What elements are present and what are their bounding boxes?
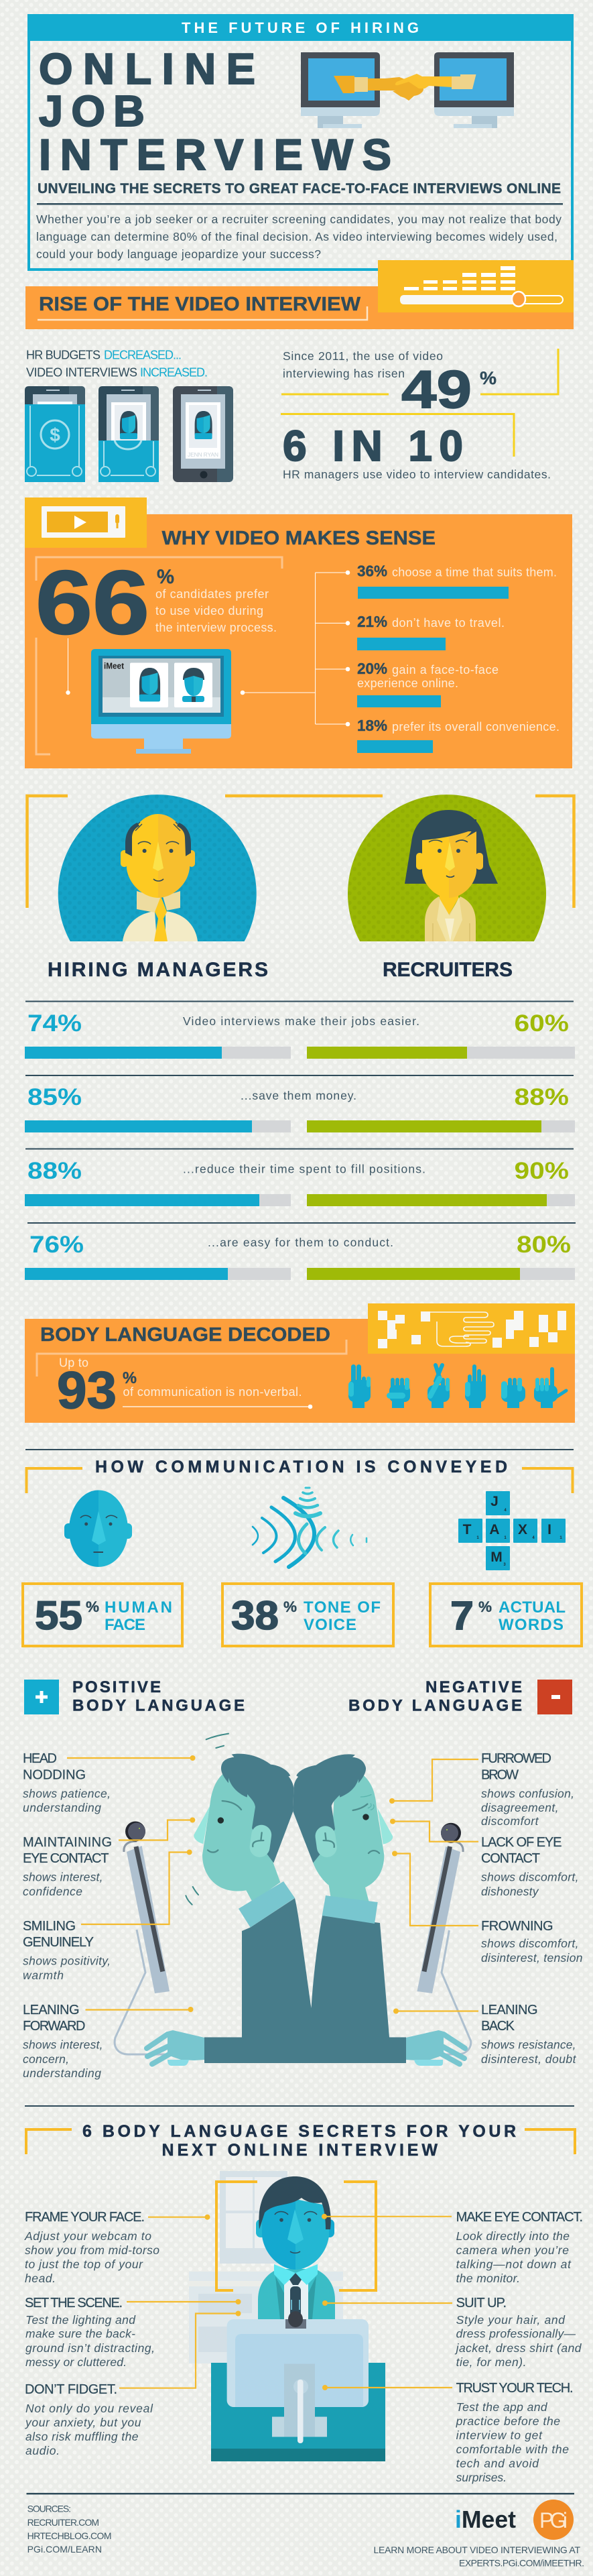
- callout: head nodding: [23, 1751, 196, 1814]
- tip: make eye contact: Look directly into the: [456, 2229, 570, 2243]
- icon: phone half uncovered: [98, 386, 159, 482]
- callout: smiling genuinely: shows positivity,: [23, 1954, 111, 1968]
- equalizer panel: [378, 260, 574, 312]
- callout: lack of eye contact: dishonesty: [481, 1885, 539, 1898]
- heading: hiring managers: HIRING MANAGERS: [48, 959, 268, 981]
- callout: furrowed brow: FURROWED: [481, 1751, 551, 1766]
- intro paragraph: language can determine 80% of the final decision. As video interviewing becomes widely used,: [36, 230, 557, 243]
- panel: 49 percent stat: interviewing has risen: [283, 367, 405, 380]
- icon: scrabble tiles: 1: [504, 1536, 507, 1540]
- intro paragraph: could your body language jeopardize your success?: [36, 247, 321, 261]
- stat card: actual words: ACTUAL: [499, 1598, 566, 1617]
- bar chart: reasons: 21%: [357, 613, 387, 630]
- row: reduce time: ...reduce their time spent to fill positions.: [183, 1163, 425, 1176]
- portrait: recruiter: [348, 795, 546, 941]
- bar chart: reasons: prefer its overall convenience.: [392, 720, 559, 734]
- icon: two monitors shaking hands: [301, 52, 514, 128]
- footer call to action: EXPERTS.PGi.COM/iMEETHR.: [459, 2557, 584, 2568]
- illustration: two mirrored candidates: [115, 1734, 471, 2066]
- callout: leaning forward: FORWARD: [23, 2019, 86, 2034]
- heading: positive: BODY LANGUAGE: [72, 1696, 245, 1715]
- icon: scrabble tiles: A: [489, 1522, 500, 1537]
- callout: leaning back: LEANING: [481, 2003, 537, 2017]
- laptop right: [417, 1823, 471, 2054]
- tip: suit up: Style your hair, and: [456, 2313, 566, 2327]
- icon: scrabble tiles: 4: [504, 1509, 507, 1513]
- icon: scrabble tiles: 4: [532, 1536, 535, 1540]
- callout: maintaining eye contact: EYE CONTACT: [23, 1851, 109, 1866]
- stat: 66 percent: 66: [36, 552, 149, 653]
- icon: pixel pattern with pointing hand: [368, 1303, 575, 1354]
- stat card: human face: %: [86, 1598, 99, 1615]
- tip: make eye contact: talking—not down at: [456, 2258, 572, 2271]
- text: budgets decreased: DECREASED...: [104, 349, 182, 362]
- panel: 49 percent stat: %: [480, 368, 497, 388]
- row: save money: [25, 1075, 575, 1132]
- tip: don't fidget: [25, 2310, 241, 2457]
- callout: head nodding: understanding: [23, 1801, 101, 1814]
- tip: set the scene: ground isn’t distracting,: [25, 2341, 155, 2355]
- callout: leaning back: disinterest, doubt: [481, 2052, 577, 2066]
- callout: smiling genuinely: SMILING: [23, 1919, 76, 1934]
- kicker: the future of hiring: THE FUTURE OF HIRING: [182, 19, 419, 36]
- intro paragraph: Whether you’re a job seeker or a recruiter screening candidates, you may not realize that body: [36, 213, 562, 226]
- callout: frowning: [392, 1851, 583, 1965]
- tip: make eye contact: [322, 2210, 583, 2285]
- stat: 66 percent: [36, 552, 277, 653]
- heading: negative: [348, 1678, 572, 1715]
- row: jobs easier: 60%: [515, 1010, 569, 1037]
- tip: suit up: dress professionally—: [456, 2327, 576, 2341]
- panel: positive vs negative body language: [23, 1678, 583, 2080]
- tip: set the scene: messy or cluttered.: [25, 2355, 127, 2369]
- text: budgets decreased: INCREASED.: [140, 366, 208, 379]
- callout: frowning: FROWNING: [481, 1919, 553, 1934]
- heading: negative: NEGATIVE: [425, 1678, 522, 1696]
- icon: sound waves: [253, 1488, 367, 1567]
- callout: maintaining eye contact: [23, 1817, 195, 1898]
- icon: iMeet desktop monitor: [91, 649, 231, 754]
- icon: phone with video candidate: JENN RYAN: [188, 451, 218, 458]
- icon: phone fully covered by dollar: [25, 386, 85, 482]
- callout: furrowed brow: [389, 1751, 574, 1828]
- tip: set the scene: SET THE SCENE.: [25, 2296, 123, 2310]
- icon: scrabble tiles: I: [547, 1522, 551, 1537]
- stat card: actual words: 7: [450, 1593, 474, 1638]
- tip: trust your tech: tech and avoid: [456, 2457, 539, 2470]
- callout: frowning: shows discomfort,: [481, 1936, 579, 1950]
- torsos: [204, 1898, 406, 2063]
- tip: trust your tech: practice before the: [456, 2414, 560, 2428]
- stat: 93 percent: [57, 1356, 312, 1419]
- logo: iMeet: iMeet: [455, 2506, 516, 2533]
- stat card: tone of voice: %: [283, 1598, 297, 1615]
- stat card: human face: FACE: [105, 1616, 145, 1634]
- callout: furrowed brow: shows confusion,: [481, 1787, 574, 1800]
- stat card: human face: [23, 1584, 182, 1646]
- stat: 66 percent: of candidates prefer: [155, 587, 269, 601]
- intro paragraph: [36, 213, 562, 261]
- tip: don't fidget: audio.: [25, 2444, 60, 2457]
- bar chart: reasons: experience online.: [357, 677, 458, 690]
- panel: 6 in 10 stat: HR managers use video to interview candidates.: [283, 468, 551, 481]
- sources: RECRUITER.COM: [27, 2517, 99, 2528]
- logo: PGi: PGi: [539, 2508, 568, 2532]
- stat card: tone of voice: 38: [231, 1593, 279, 1638]
- row: jobs easier: Video interviews make their jobs easier.: [183, 1014, 419, 1028]
- hands: [147, 2030, 465, 2066]
- sources: SOURCES:: [27, 2504, 71, 2514]
- tip: frame your face: Adjust your webcam to: [24, 2229, 151, 2243]
- stat: 93 percent: of communication is non-verbal.: [123, 1385, 302, 1399]
- bar chart: reasons: [357, 562, 559, 753]
- callout: maintaining eye contact: MAINTAINING: [23, 1835, 112, 1850]
- title: INTERVIEWS: [39, 130, 391, 179]
- tip: make eye contact: MAKE EYE CONTACT.: [456, 2210, 583, 2225]
- tip: suit up: tie, for men).: [456, 2355, 527, 2369]
- heading: BODY LANGUAGE DECODED: [40, 1324, 330, 1346]
- tip: set the scene: Test the lighting and: [25, 2313, 136, 2327]
- stat card: actual words: WORDS: [499, 1616, 564, 1634]
- callout: maintaining eye contact: confidence: [23, 1885, 82, 1898]
- callout: leaning forward: LEANING: [23, 2003, 79, 2017]
- tip: don't fidget: your anxiety, but you: [25, 2416, 141, 2429]
- tip: set the scene: make sure the back-: [25, 2327, 135, 2341]
- laptop left: [115, 1821, 170, 2054]
- tip: trust your tech: comfortable with the: [456, 2443, 569, 2456]
- tip: frame your face: FRAME YOUR FACE.: [25, 2210, 145, 2225]
- row: jobs easier: 74%: [27, 1010, 82, 1037]
- row: save money: ...save them money.: [241, 1089, 356, 1102]
- tip: trust your tech: TRUST YOUR TECH.: [456, 2381, 574, 2396]
- tip: suit up: jacket, dress shirt (and: [455, 2341, 582, 2355]
- text: budgets decreased: [26, 349, 208, 379]
- icon: scrabble tiles: J: [490, 1494, 499, 1509]
- heading: recruiters: RECRUITERS: [383, 959, 513, 981]
- stat card: human face: HUMAN: [105, 1598, 172, 1617]
- callout: head nodding: NODDING: [23, 1767, 86, 1782]
- connector tree: [241, 571, 350, 726]
- icon: phone fully covered by dollar: $: [50, 424, 60, 445]
- tip: make eye contact: the monitor.: [456, 2272, 520, 2285]
- row: save money: 85%: [27, 1084, 82, 1110]
- stat card: tone of voice: TONE OF: [304, 1598, 381, 1617]
- panel: how communication is conveyed: [23, 1449, 582, 1646]
- panel: 49 percent stat: [281, 349, 558, 419]
- callout: lack of eye contact: shows discomfort,: [481, 1871, 579, 1884]
- callout: head nodding: HEAD: [23, 1751, 57, 1766]
- panel: why video makes sense: [25, 497, 572, 768]
- callout: leaning forward: shows interest,: [23, 2038, 103, 2052]
- panel: rise of the video interview: [25, 260, 574, 329]
- tip: set the scene: [25, 2296, 241, 2369]
- icon: phone with video candidate: [173, 386, 233, 482]
- head left: positive: [186, 1734, 293, 1905]
- icon: scrabble tiles: 1: [476, 1536, 479, 1540]
- bar chart: reasons: 36%: [357, 562, 387, 579]
- sources: [27, 2504, 111, 2555]
- tip: frame your face: to just the top of your: [25, 2258, 143, 2271]
- tip: frame your face: head.: [25, 2272, 56, 2285]
- title: JOB: [39, 86, 145, 135]
- stat: 66 percent: to use video during: [155, 604, 263, 618]
- head right: negative: [293, 1754, 393, 1902]
- callout: smiling genuinely: warmth: [23, 1969, 64, 1982]
- heading: WHY VIDEO MAKES SENSE: [162, 528, 436, 549]
- text: budgets decreased: HR BUDGETS: [26, 349, 101, 362]
- heading: negative: BODY LANGUAGE: [348, 1696, 522, 1715]
- window and room: [189, 2171, 343, 2363]
- heading: positive: [24, 1678, 245, 1715]
- subtitle: UNVEILING THE SECRETS TO GREAT FACE-TO-FACE INTERVIEWS ONLINE: [38, 181, 561, 196]
- portrait: hiring manager: [58, 795, 257, 941]
- callout: smiling genuinely: GENUINELY: [23, 1935, 94, 1950]
- heading: 6 BODY LANGUAGE SECRETS FOR YOUR: [82, 2122, 516, 2141]
- row: easy to conduct: ...are easy for them to conduct.: [208, 1236, 393, 1249]
- bar chart: reasons: choose a time that suits them.: [392, 566, 557, 579]
- tip: frame your face: [24, 2210, 210, 2285]
- panel: 49 percent stat: 49: [401, 359, 472, 419]
- callout: lack of eye contact: CONTACT: [481, 1851, 540, 1866]
- icon: video player: [25, 497, 147, 548]
- row: reduce time: 90%: [515, 1158, 569, 1184]
- text: budgets decreased: VIDEO INTERVIEWS: [26, 366, 137, 379]
- bar chart: reasons: 18%: [357, 717, 387, 734]
- person: [256, 2176, 335, 2320]
- callout: leaning forward: [23, 2003, 193, 2080]
- sources: PGi.COM/LEARN: [27, 2544, 102, 2555]
- logo: PGi: [533, 2500, 574, 2540]
- row: jobs easier: [25, 1000, 575, 1059]
- bar chart: reasons: gain a face-to-face: [392, 663, 499, 677]
- stat: 93 percent: 93: [57, 1360, 117, 1419]
- monitor back: [227, 2319, 369, 2443]
- tip: make eye contact: camera when you’re: [456, 2243, 569, 2257]
- footer call to action: LEARN MORE ABOUT VIDEO INTERVIEWING AT: [374, 2544, 580, 2555]
- icon: scrabble tiles: 1: [559, 1536, 562, 1540]
- icon: scrabble tiles: 3: [503, 1563, 506, 1567]
- callout: lack of eye contact: [390, 1818, 579, 1898]
- heading: HOW COMMUNICATION IS CONVEYED: [95, 1458, 507, 1476]
- panel: 49 percent stat: Since 2011, the use of video: [283, 349, 443, 363]
- callout: smiling genuinely: [23, 1849, 192, 1982]
- panel: 6 in 10 stat: 6 IN 10: [283, 422, 463, 470]
- tip: trust your tech: interview to get: [456, 2428, 543, 2442]
- icon: iMeet desktop monitor: iMeet: [104, 661, 125, 670]
- row: reduce time: [25, 1148, 575, 1206]
- panel: budgets and phones: [25, 349, 233, 482]
- callout: leaning forward: understanding: [23, 2066, 101, 2080]
- heading: RISE OF THE VIDEO INTERVIEW: [39, 294, 361, 315]
- callout: furrowed brow: disagreement,: [481, 1801, 559, 1814]
- heading: positive: POSITIVE: [72, 1678, 161, 1696]
- callout: furrowed brow: BROW: [481, 1767, 519, 1782]
- bar chart: reasons: 20%: [357, 660, 387, 677]
- panel: 6 in 10 stat: [281, 414, 551, 481]
- tip: frame your face: show you from mid-torso: [25, 2243, 159, 2257]
- tip: don't fidget: also risk muffling the: [25, 2430, 139, 2443]
- row: save money: 88%: [515, 1084, 569, 1110]
- row: easy to conduct: [25, 1222, 576, 1280]
- callout: leaning back: BACK: [481, 2019, 515, 2034]
- heading: [82, 2122, 516, 2160]
- footer call to action: [374, 2544, 584, 2568]
- tip: trust your tech: surprises.: [456, 2471, 507, 2484]
- bar chart: reasons: don’t have to travel.: [392, 616, 505, 630]
- icon: scrabble tiles: [458, 1491, 566, 1570]
- tip: suit up: SUIT UP.: [456, 2296, 507, 2310]
- panel: six body language secrets: [24, 2122, 583, 2484]
- stat: 93 percent: Up to: [59, 1356, 88, 1369]
- callout: leaning forward: concern,: [23, 2052, 69, 2066]
- tip: trust your tech: [322, 2381, 574, 2484]
- stat: 66 percent: the interview process.: [155, 621, 277, 634]
- tip: don't fidget: Not only do you reveal: [25, 2402, 153, 2415]
- icon: hand signs: [348, 1364, 566, 1408]
- title: [39, 44, 391, 179]
- callout: leaning back: shows resistance,: [481, 2038, 576, 2052]
- callout: head nodding: shows patience,: [23, 1787, 111, 1800]
- comparison chart: managers vs recruiters: [25, 1000, 576, 1280]
- stat card: actual words: %: [478, 1598, 492, 1615]
- desk: [211, 2363, 385, 2461]
- icon: scrabble tiles: T: [463, 1522, 472, 1537]
- stat card: actual words: [430, 1584, 582, 1646]
- callout: maintaining eye contact: shows interest,: [23, 1871, 103, 1884]
- title: ONLINE: [39, 44, 255, 93]
- shirt collars: [239, 1881, 378, 1928]
- framing brackets: [216, 2182, 376, 2290]
- tip: don't fidget: DON’T FIDGET.: [25, 2382, 117, 2397]
- callout: frowning: disinterest, tension: [481, 1951, 583, 1965]
- icon: scrabble tiles: X: [518, 1522, 527, 1537]
- tip: suit up: [322, 2296, 582, 2369]
- icon: scrabble tiles: M: [490, 1549, 503, 1565]
- row: easy to conduct: 80%: [517, 1232, 571, 1258]
- sources: HRTECHBLOG.COM: [27, 2530, 111, 2541]
- illustration: interview setup: [189, 2171, 385, 2461]
- row: easy to conduct: 76%: [29, 1232, 84, 1258]
- icon: human face: [64, 1490, 132, 1567]
- panel: header: [27, 14, 574, 270]
- panel: body language decoded: [25, 1303, 575, 1423]
- callout: lack of eye contact: LACK OF EYE: [481, 1835, 562, 1850]
- callout: furrowed brow: discomfort: [481, 1814, 539, 1828]
- stat card: human face: 55: [35, 1593, 82, 1638]
- callout: leaning back: [393, 2003, 577, 2066]
- webcam: [285, 2311, 306, 2329]
- stat: 93 percent: %: [123, 1369, 137, 1387]
- stat card: tone of voice: [222, 1584, 393, 1646]
- tip: trust your tech: Test the app and: [456, 2400, 548, 2414]
- heading: NEXT ONLINE INTERVIEW: [162, 2141, 438, 2160]
- stat: 66 percent: %: [157, 566, 174, 588]
- stat card: tone of voice: VOICE: [304, 1616, 356, 1634]
- panel: hiring managers and recruiters portraits: [27, 795, 574, 981]
- row: reduce time: 88%: [27, 1158, 82, 1184]
